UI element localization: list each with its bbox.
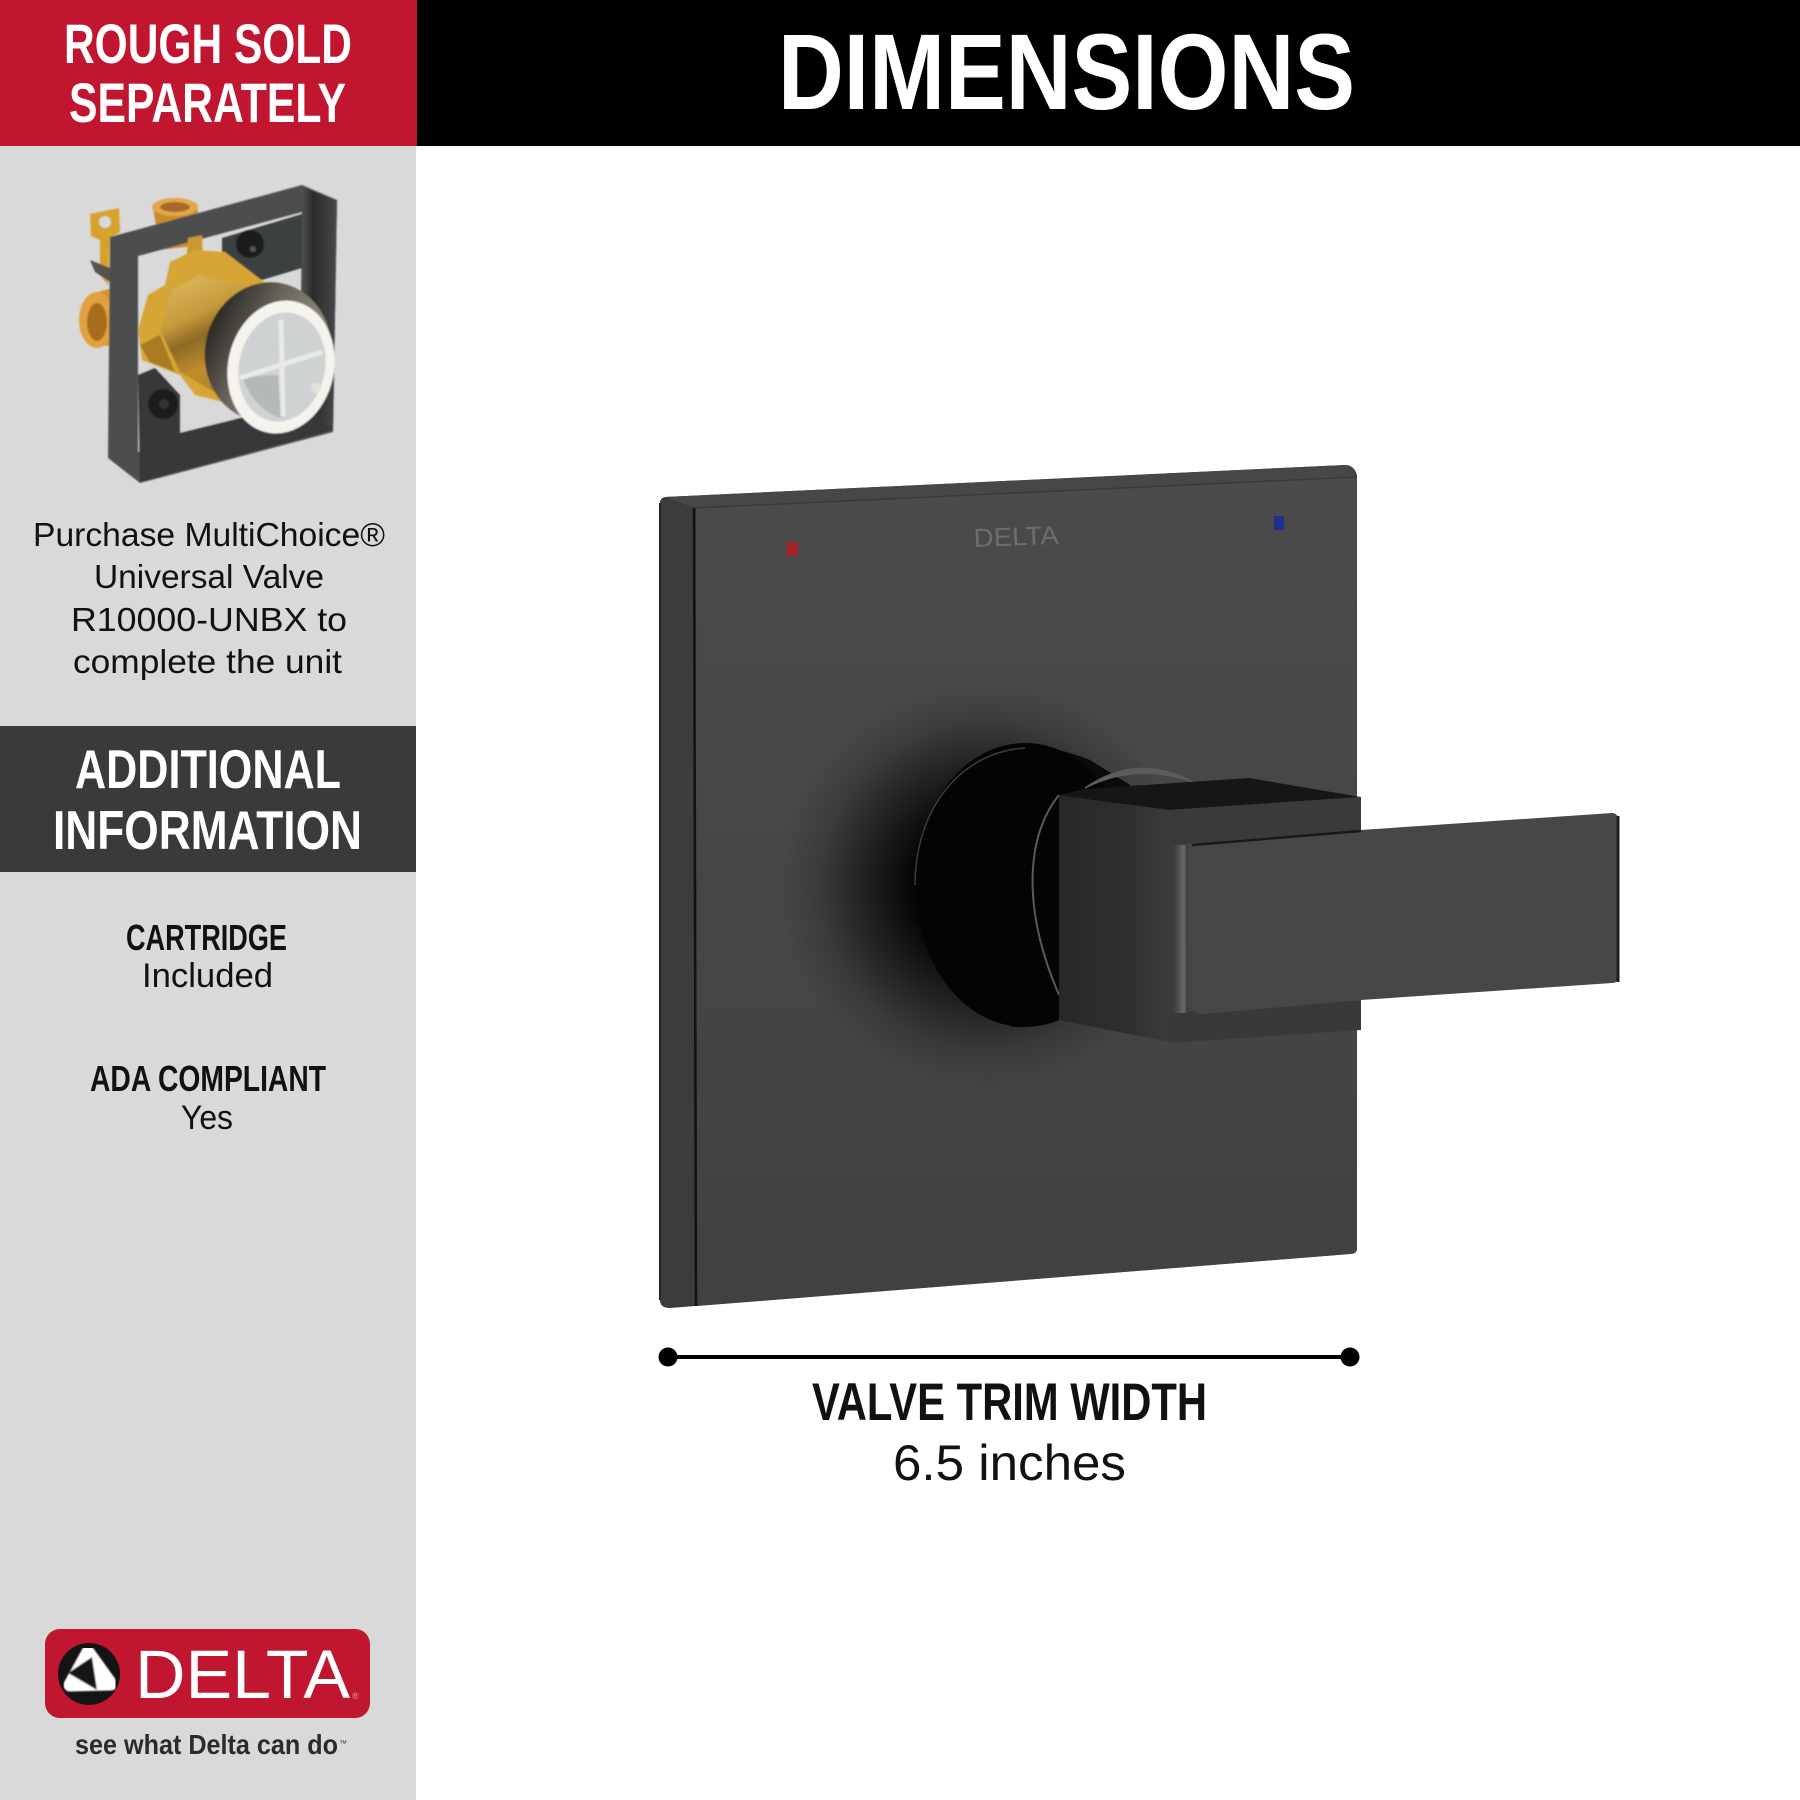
upper bracket	[222, 214, 302, 280]
text: purchase note: R10000-UNBX to	[71, 601, 347, 638]
text: purchase note: complete the unit	[73, 643, 342, 680]
round escutcheon	[915, 743, 1193, 1027]
banner: rough sold separately: SEPARATELY	[69, 71, 346, 134]
sidebar panel	[0, 146, 416, 1800]
top copper stub	[153, 203, 200, 250]
banner: rough sold separately: ROUGH SOLD	[64, 12, 352, 75]
text: purchase note	[33, 516, 385, 680]
lever block	[1059, 778, 1361, 1043]
upper pipe neck	[186, 235, 203, 265]
dimension line	[658, 1348, 1360, 1366]
plate face	[696, 477, 1357, 1306]
logo: delta: ®	[352, 1691, 359, 1701]
title bar: dimensions	[417, 0, 1800, 146]
lever handle	[1190, 813, 1618, 1014]
text: purchase note: Universal Valve	[94, 558, 324, 595]
banner: rough sold separately	[0, 0, 417, 146]
plate marks: DELTA	[973, 520, 1060, 553]
dimension label: valve trim width: 6.5 inches	[893, 1435, 1126, 1491]
right wall of frame	[300, 187, 337, 431]
handle shadow	[780, 680, 1190, 1090]
collar	[192, 270, 344, 434]
frame	[108, 185, 337, 483]
heading: additional information: INFORMATION	[53, 799, 362, 861]
plate edge line	[694, 508, 696, 1306]
brass flanges	[138, 250, 268, 405]
logo: delta: DELTA	[135, 1636, 350, 1713]
plate top bevel	[665, 465, 1357, 508]
spec: ada compliant: Yes	[181, 1099, 233, 1137]
heading: additional information	[0, 726, 416, 872]
spec: ada compliant: ADA COMPLIANT	[90, 1058, 326, 1099]
dimension label: valve trim width: VALVE TRIM WIDTH	[812, 1373, 1207, 1432]
plate outer edge	[660, 465, 1357, 1308]
spec: ada compliant	[90, 1058, 326, 1137]
text: purchase note: Purchase MultiChoice®	[33, 516, 385, 553]
icon: rough-in valve	[79, 185, 347, 483]
heading: additional information: ADDITIONAL	[75, 738, 341, 800]
left copper stub	[95, 288, 112, 347]
title bar: dimensions: DIMENSIONS	[778, 11, 1355, 132]
plate marks	[787, 516, 1284, 556]
logo: delta: see what Delta can do	[75, 1729, 338, 1760]
dimension label: valve trim width	[812, 1373, 1207, 1491]
spec: cartridge: Included	[142, 957, 273, 995]
logo: delta	[45, 1629, 370, 1760]
spec: cartridge: CARTRIDGE	[126, 917, 287, 958]
mounting tab	[90, 208, 120, 285]
spec: cartridge	[126, 917, 287, 995]
lower bracket and bottom band	[138, 368, 333, 482]
bolts	[236, 230, 264, 258]
white ring	[215, 290, 347, 444]
brass cylinder	[160, 275, 268, 400]
icon: delta triangle	[68, 1652, 111, 1690]
product: valve trim plate with handle	[660, 465, 1618, 1308]
cap	[229, 304, 335, 430]
logo: delta: ™	[339, 1739, 347, 1748]
